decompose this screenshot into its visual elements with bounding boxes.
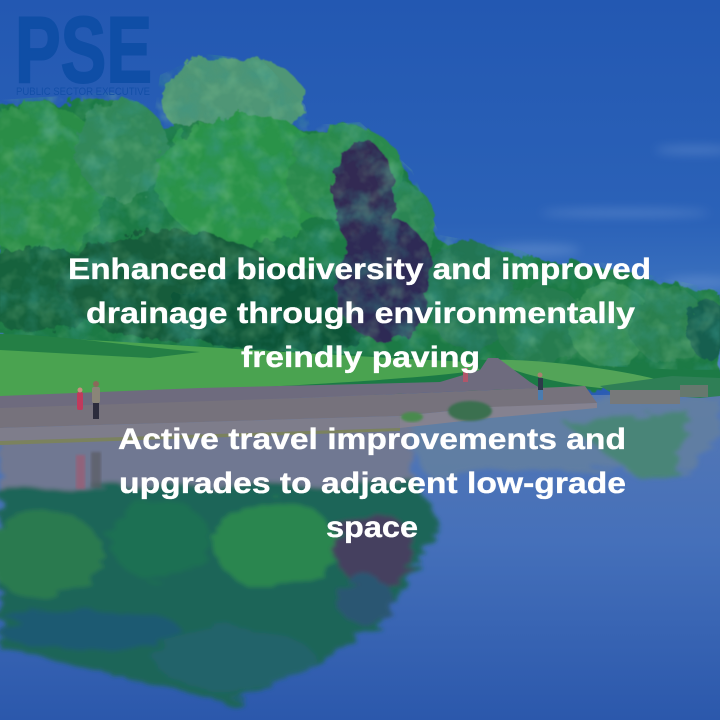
left canopy [0,102,108,258]
path [0,358,540,410]
first message text: drainage through environmentally [86,297,635,330]
centre canopy [157,115,333,245]
logo: PSE: PSE [15,0,152,102]
dark red tree [333,140,393,250]
second message text: upgrades to adjacent low-grade [119,467,626,500]
right trees [425,240,515,350]
tree masses [0,50,720,390]
foliage texture [0,50,720,370]
grass bank [0,336,480,397]
people [77,368,543,419]
second message text [118,423,626,544]
pier [610,390,680,404]
second message text: Active travel improvements and [118,423,626,456]
reflection of people [76,455,85,489]
thin clouds [490,146,720,287]
base canopy [0,98,720,390]
first message text: freindly paving [241,341,480,374]
water [0,395,720,720]
stone embankment [0,386,597,428]
second message text: space [326,511,418,544]
tall pale tree [161,56,305,144]
sky [0,0,720,370]
logo tagline: PUBLIC SECTOR EXECUTIVE [16,86,150,98]
first message text [68,253,651,374]
first message text: Enhanced biodiversity and improved [68,253,651,286]
reeds [448,401,492,421]
tree reflection [0,396,720,705]
